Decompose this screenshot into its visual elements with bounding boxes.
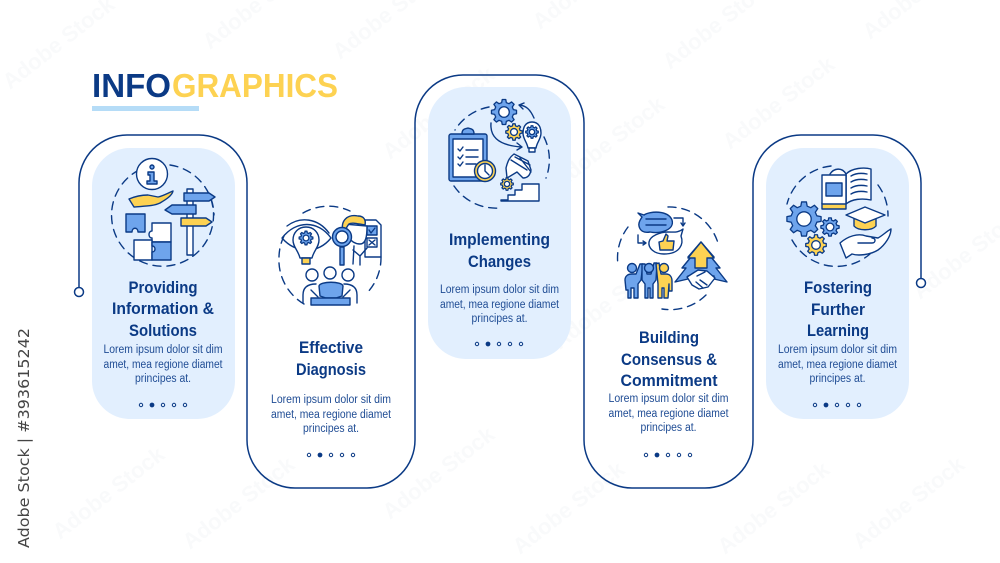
pagination dots <box>307 453 355 457</box>
body text: Lorem ipsum dolor sit dim <box>104 344 222 356</box>
heading <box>449 230 550 271</box>
panel: Effective Diagnosis <box>271 206 392 457</box>
icon: clipboard, gears and stairs <box>449 99 549 208</box>
heading: Fostering <box>804 278 872 297</box>
body text: amet, mea regione diamet <box>271 409 392 421</box>
body text: amet, mea regione diamet <box>778 359 898 371</box>
heading <box>112 278 214 340</box>
pagination dots <box>139 403 187 407</box>
body text <box>104 344 223 385</box>
body text: amet, mea regione diamet <box>608 408 729 420</box>
text: Adobe Stock <box>48 441 170 544</box>
body text: amet, mea regione diamet <box>440 299 560 311</box>
body text <box>608 393 729 434</box>
icon: speech bubbles, team and handshake <box>618 207 727 310</box>
heading <box>804 278 872 340</box>
text: Adobe Stock <box>378 421 500 524</box>
heading: Further <box>811 300 865 319</box>
text: Adobe Stock <box>713 456 835 559</box>
end node <box>916 278 926 288</box>
panel: Providing Information & Solutions <box>92 148 235 419</box>
icon: information, signpost and puzzle <box>112 158 215 266</box>
heading: Commitment <box>620 371 718 390</box>
icon: eye, magnifier and team <box>279 206 381 305</box>
body text: principes at. <box>472 313 528 325</box>
body text <box>778 344 898 385</box>
body text: Lorem ipsum dolor sit dim <box>608 393 728 405</box>
text: Adobe Stock <box>848 451 970 554</box>
body text <box>440 284 560 325</box>
heading: Information & <box>112 299 214 318</box>
body text: amet, mea regione diamet <box>104 359 223 371</box>
start node <box>74 288 84 296</box>
connecting outline <box>79 75 921 488</box>
body text: Lorem ipsum dolor sit dim <box>778 344 897 356</box>
body text: principes at. <box>303 423 359 435</box>
pagination dots <box>475 342 523 346</box>
text: Adobe Stock <box>548 251 670 354</box>
text: Adobe Stock <box>378 61 500 164</box>
text: Adobe Stock <box>718 51 840 154</box>
icon: book, gears, cap and hand <box>787 166 891 266</box>
heading: Effective <box>299 338 363 357</box>
panel: Fostering Further Learning <box>766 148 909 419</box>
heading <box>296 338 366 379</box>
pagination dots <box>644 453 692 457</box>
body text: Lorem ipsum dolor sit dim <box>271 394 391 406</box>
title: INFOGRAPHICS: GRAPHICS <box>172 67 338 104</box>
heading: Building <box>639 328 699 347</box>
heading: Learning <box>807 321 869 340</box>
body text: principes at. <box>135 373 191 385</box>
heading: Diagnosis <box>296 360 366 379</box>
heading: Implementing <box>449 230 550 249</box>
body text: principes at. <box>640 422 696 434</box>
title: INFOGRAPHICS: INFO <box>92 67 171 104</box>
panel: Implementing Changes <box>428 87 571 359</box>
title: INFOGRAPHICS <box>92 67 338 111</box>
body text: principes at. <box>810 373 866 385</box>
text: Adobe Stock <box>178 451 300 554</box>
heading: Consensus & <box>621 350 717 369</box>
heading: Changes <box>468 252 531 271</box>
panel: Building Consensus & Commitment <box>608 207 729 457</box>
body text <box>271 394 392 435</box>
heading <box>620 328 718 390</box>
body text: Lorem ipsum dolor sit dim <box>440 284 559 296</box>
heading: Providing <box>128 278 198 297</box>
text: Adobe Stock <box>548 91 670 194</box>
text: Adobe Stock <box>508 456 630 559</box>
heading: Solutions <box>129 321 197 340</box>
stock id label: Adobe Stock | #393615242 <box>15 328 33 548</box>
pagination dots <box>813 403 861 407</box>
